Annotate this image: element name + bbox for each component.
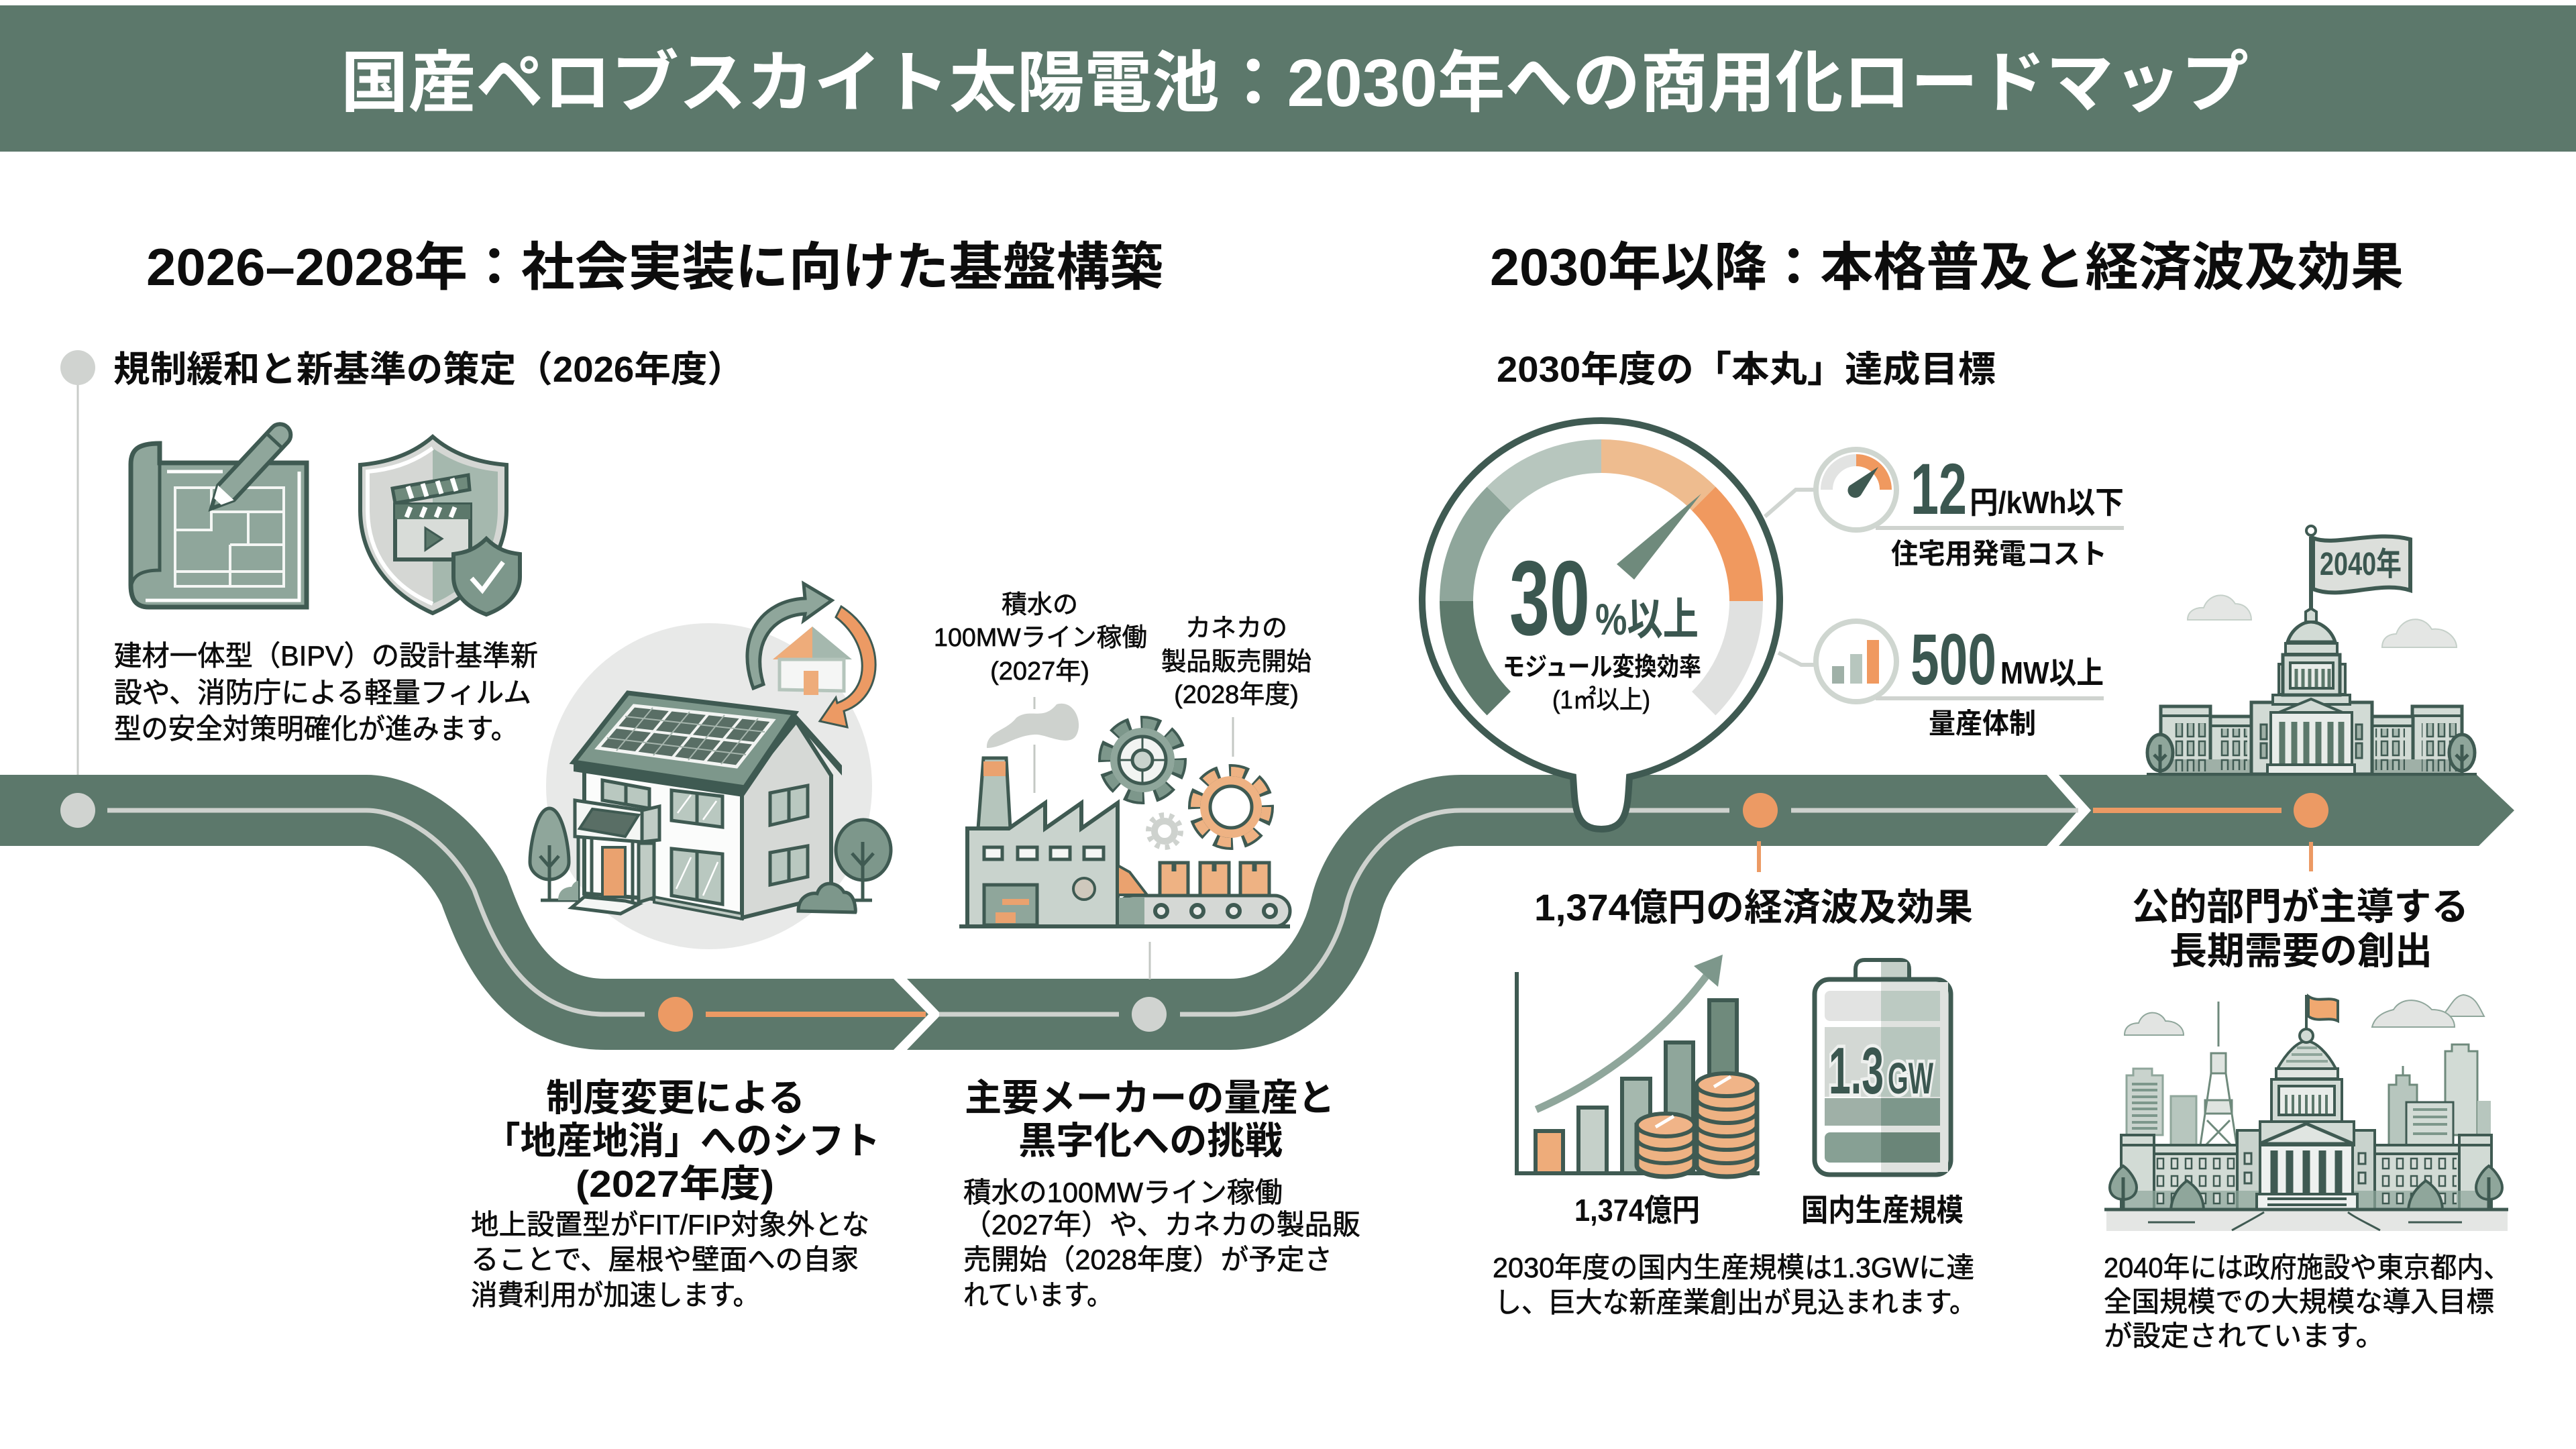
heading: economic effect: 1,374億円の経済波及効果 xyxy=(1534,886,1973,928)
label: domestic production: 国内生産規模 xyxy=(1801,1193,1964,1228)
heading: public sector demand: 公的部門が主導する xyxy=(2132,885,2469,928)
icon: self-consumption cycle arrows xyxy=(747,584,875,727)
label: Sekisui 100MW line: 100MWライン稼働 xyxy=(934,624,1147,652)
road node: economy xyxy=(1743,793,1778,872)
icon: cityscape with diet building xyxy=(2104,995,2508,1231)
metric: production capacity: 500 xyxy=(1911,619,1996,700)
text: production body: 2030年度の国内生産規模は1.3GWに達 xyxy=(1493,1252,1974,1283)
heading: manufacturers xyxy=(965,1077,1335,1162)
road node: 2040 xyxy=(2294,793,2328,871)
text: manufacturers body: れています。 xyxy=(963,1279,1112,1311)
heading: 2030 onward: 2030年以降：本格普及と経済波及効果 xyxy=(1490,237,2404,297)
heading: local production shift xyxy=(484,1077,880,1205)
roadmap road xyxy=(0,775,2514,1051)
text: BIPV description: 建材一体型（BIPV）の設計基準新 xyxy=(114,640,538,672)
text: BIPV description: 設や、消防庁による軽量フィルム xyxy=(114,677,531,708)
text: manufacturers body: （2027年）や、カネカの製品販 xyxy=(963,1209,1360,1240)
metric: production capacity: MW以上 xyxy=(2000,655,2104,690)
label: Kaneka sales start: 製品販売開始 xyxy=(1161,648,1311,676)
heading: manufacturers: 黒字化への挑戦 xyxy=(1018,1120,1283,1162)
label: Sekisui 100MW line: 積水の xyxy=(1002,591,1078,619)
heading: public sector demand: 長期需要の創出 xyxy=(2169,930,2432,972)
road node: start xyxy=(60,793,95,828)
label: Kaneka sales start: (2028年度) xyxy=(1174,681,1299,709)
metric: residential cost: 住宅用発電コスト xyxy=(1891,538,2107,570)
text: local production body: ることで、屋根や壁面への自家 xyxy=(471,1244,859,1275)
icon: battery 1.3GW: 1.3 xyxy=(1829,1034,1884,1108)
road node: makers xyxy=(1132,997,1167,1032)
metric: residential cost: 12 xyxy=(1911,448,1967,529)
label: Sekisui 100MW line xyxy=(934,591,1147,686)
text: manufacturers body: 積水の100MWライン稼働 xyxy=(963,1177,1283,1208)
text: local production body xyxy=(471,1209,869,1311)
title banner: 国産ペロブスカイト太陽電池：2030年への商用化ロードマップ xyxy=(341,46,2249,121)
text: 2040 body xyxy=(2104,1252,2510,1352)
icon: battery 1.3GW: GW xyxy=(1888,1053,1933,1103)
heading: public sector demand xyxy=(2132,885,2469,972)
icon: safety shield with clapperboard xyxy=(360,437,520,614)
subheading: 2030 targets: 2030年度の「本丸」達成目標 xyxy=(1497,350,1996,390)
subheading: 2026 regulation: 規制緩和と新基準の策定（2026年度） xyxy=(113,350,744,390)
icon: national diet building with 2040 flag xyxy=(2147,526,2477,774)
heading: local production shift: 制度変更による xyxy=(546,1077,805,1119)
heading: local production shift: 「地産地消」へのシフト xyxy=(484,1120,880,1162)
label: Sekisui 100MW line: (2027年) xyxy=(990,657,1089,686)
gauge callout: conversion efficiency: モジュール変換効率 xyxy=(1503,653,1701,682)
gauge callout: conversion efficiency: (1㎡以上) xyxy=(1552,686,1650,714)
icon: battery 1.3GW xyxy=(1815,960,1951,1175)
icon: factory with gears and conveyor xyxy=(959,697,1290,979)
text: 2040 body: 2040年には政府施設や東京都内、 xyxy=(2104,1252,2510,1283)
heading: 2026-2028: 2026–2028年：社会実装に向けた基盤構築 xyxy=(146,237,1163,297)
gauge callout: conversion efficiency xyxy=(1422,421,1780,829)
text: local production body: 地上設置型がFIT/FIP対象外とな xyxy=(471,1209,869,1240)
chart: economic growth bars with coins xyxy=(1517,955,1760,1177)
icon: house with solar roof xyxy=(530,623,891,949)
gauge callout: conversion efficiency: %以上 xyxy=(1595,594,1699,644)
label: Kaneka sales start: カネカの xyxy=(1185,614,1287,643)
heading: manufacturers: 主要メーカーの量産と xyxy=(965,1077,1335,1119)
text: BIPV description: 型の安全対策明確化が進みます。 xyxy=(114,713,518,745)
text: manufacturers body xyxy=(963,1177,1360,1311)
label: 1,374 oku yen: 1,374億円 xyxy=(1574,1193,1700,1228)
text: production body xyxy=(1493,1252,1976,1318)
text: manufacturers body: 売開始（2028年度）が予定さ xyxy=(963,1244,1332,1275)
icon: blueprint and pencil xyxy=(131,420,307,607)
text: production body: し、巨大な新産業創出が見込まれます。 xyxy=(1495,1287,1976,1318)
metric: production capacity xyxy=(1778,619,2104,739)
metric: residential cost xyxy=(1765,448,2124,570)
milestone leader: 2026 xyxy=(60,350,95,782)
metric: production capacity: 量産体制 xyxy=(1929,708,2036,739)
icon: national diet building with 2040 flag: 2040年 xyxy=(2320,547,2402,582)
text: local production body: 消費利用が加速します。 xyxy=(471,1279,759,1311)
heading: local production shift: (2027年度) xyxy=(576,1163,774,1205)
title banner xyxy=(0,5,2576,152)
metric: residential cost: 円/kWh以下 xyxy=(1970,485,2124,520)
label: Kaneka sales start xyxy=(1161,614,1311,709)
road node: 2027 xyxy=(658,997,693,1032)
text: 2040 body: が設定されています。 xyxy=(2104,1320,2384,1352)
gauge callout: conversion efficiency: 30 xyxy=(1509,539,1590,657)
text: 2040 body: 全国規模での大規模な導入目標 xyxy=(2104,1286,2494,1318)
text: BIPV description xyxy=(114,640,538,745)
